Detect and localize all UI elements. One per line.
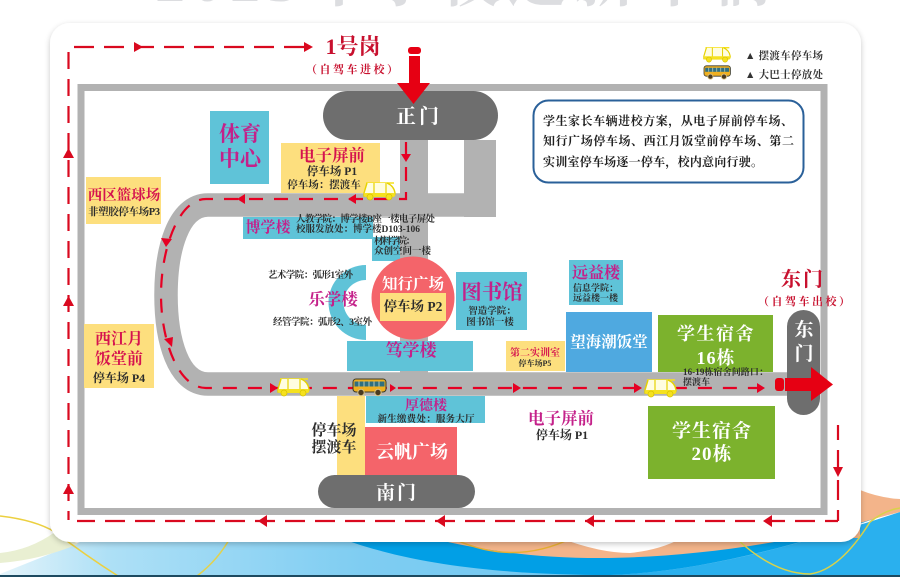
building: 望海潮饭堂 (566, 312, 652, 372)
parking: 电子屏前 P1: 停车场：摆渡车 (287, 178, 361, 191)
campus perimeter road (81, 88, 824, 512)
building: 学生宿舍16栋 (658, 315, 773, 372)
inner route dashed line (161, 142, 762, 388)
parking: 电子屏前 P1: 电子屏前 (299, 146, 366, 165)
arrow: entrance at 正门 (397, 47, 430, 104)
parking: 西区篮球场 P3 (86, 177, 161, 224)
label: 1号岗: （自驾车进校） (306, 62, 398, 76)
building: 图书馆: 图书馆 (461, 281, 523, 304)
gate: 正门 (323, 91, 498, 140)
parking: 电子屏前 P1: 停车场 P1 (307, 164, 357, 178)
building: 体育中心: 体育 (219, 122, 261, 146)
gate: 东门: 东 (794, 319, 814, 341)
icon: shuttle on south road right (645, 380, 676, 397)
info box: 知行广场停车场、西江月饭堂前停车场、第二 (543, 133, 794, 148)
building: 学生宿舍20栋: 20栋 (691, 443, 733, 465)
parking: 电子屏前 P1 (281, 143, 380, 193)
label: 1号岗 (306, 34, 398, 76)
plaza: 云帆广场 (365, 427, 457, 475)
博学楼 notes (296, 213, 435, 257)
parking: 南门摆渡车: 摆渡车 (311, 438, 357, 456)
outer route arrowheads (63, 42, 843, 527)
label: 电子屏前 P1 south (528, 409, 594, 442)
legend: ▲ 大巴士停放处 (745, 68, 824, 81)
parking: 西江月饭堂前 P4: 饭堂前 (95, 349, 143, 368)
label: 1号岗: 1号岗 (325, 34, 381, 59)
outer route dashed line (74, 46, 310, 48)
parking: 第二实训室 P5: 第二实训室 (510, 346, 560, 359)
building: 体育中心: 中心 (219, 147, 264, 171)
parking: 第二实训室 P5: 停车场P5 (519, 358, 551, 368)
parking: 南门摆渡车 (311, 396, 365, 475)
parking: 西江月饭堂前 P4: 停车场 P4 (93, 370, 145, 385)
building: 乐学楼: 经管学院：弧形2、3室外 (273, 316, 373, 328)
building: 乐学楼: 艺术学院：弧形1室外 (268, 269, 354, 281)
building: 图书馆: 智造学院： (468, 305, 516, 317)
arrow: exit at 东门 (775, 367, 833, 401)
label: 东门 exit (758, 268, 850, 308)
gate: 东门 (787, 310, 820, 415)
博学楼 notes: 材料学院： (374, 235, 415, 247)
info box: 学生家长车辆进校方案，从电子屏前停车场、 (543, 113, 793, 128)
icon: bus on south road (353, 379, 386, 396)
internal roads (166, 140, 790, 384)
building: 乐学楼: 乐学楼 (308, 289, 359, 309)
building: 厚德楼: 新生缴费处：服务大厅 (378, 413, 475, 425)
building: 博学楼: 博学楼 (245, 218, 292, 236)
博学楼 notes: 校服发放处：博学楼D103-106 (296, 223, 420, 235)
博学楼 notes: 众创空间一楼 (374, 245, 432, 257)
legend (704, 48, 824, 81)
building: 体育中心 (210, 111, 269, 184)
building: 望海潮饭堂: 望海潮饭堂 (570, 332, 648, 351)
plaza: 知行广场 P2: 知行广场 (382, 275, 444, 293)
parking: 南门摆渡车: 停车场 (311, 421, 357, 439)
building: 博学楼 (243, 217, 373, 239)
博学楼 notes: 人教学院：博学楼B座一楼电子屏处 (296, 213, 435, 225)
building: 学生宿舍20栋: 学生宿舍 (672, 419, 752, 442)
parking: 西江月饭堂前 P4 (84, 324, 154, 388)
gate: 东门: 门 (794, 343, 814, 365)
parking: 西区篮球场 P3: 非塑胶停车场P3 (88, 205, 160, 218)
building: 图书馆 (456, 272, 527, 330)
gate: 南门: 南门 (376, 481, 418, 504)
plaza: 知行广场 P2: 停车场 P2 (384, 298, 443, 314)
label: 东门 exit: 东门 (781, 268, 825, 291)
building: 学生宿舍16栋: 16栋 (696, 348, 736, 368)
building: 远益楼: 远益楼 (572, 263, 622, 282)
icon: shuttle on south road left (278, 379, 309, 396)
plaza: 知行广场 P2 (372, 256, 454, 340)
parking: 西区篮球场 P3: 西区篮球场 (88, 186, 161, 204)
label: 电子屏前 P1 south: 停车场 P1 (536, 427, 588, 442)
dormitory road note: 摆渡车 (683, 376, 710, 387)
building: 乐学楼 (268, 265, 373, 340)
building: 厚德楼 (366, 396, 485, 425)
inner route arrowheads (161, 154, 765, 393)
building: 笃学楼: 笃学楼 (386, 340, 438, 360)
building: 材料学院 block (372, 237, 400, 261)
building: 图书馆: 图书馆一楼 (466, 316, 515, 328)
building: 学生宿舍16栋: 学生宿舍 (677, 323, 755, 344)
plaza: 云帆广场: 云帆广场 (376, 441, 448, 462)
building: 厚德楼: 厚德楼 (405, 397, 448, 414)
parking: 第二实训室 P5 (506, 341, 565, 371)
building: 远益楼: 远益楼一楼 (573, 292, 619, 303)
label: 东门 exit: （自驾车出校） (758, 294, 850, 308)
gate: 正门: 正门 (396, 105, 442, 128)
gate: 南门 (318, 475, 475, 508)
icon: shuttle at 电子屏前 (364, 183, 395, 200)
building: 远益楼: 信息学院： (573, 282, 618, 293)
dormitory road note: 16-19栋宿舍间路口： (683, 366, 768, 377)
label: 电子屏前 P1 south: 电子屏前 (528, 409, 594, 428)
dormitory road note (683, 366, 768, 387)
legend: ▲ 摆渡车停车场 (745, 49, 824, 62)
building: 学生宿舍20栋 (648, 406, 775, 479)
info box (534, 100, 804, 182)
info box: 实训室停车场逐一停车，校内意向行驶。 (543, 154, 763, 169)
building: 笃学楼 (347, 340, 473, 371)
building: 远益楼 (569, 260, 623, 305)
parking: 西江月饭堂前 P4: 西江月 (95, 330, 143, 348)
